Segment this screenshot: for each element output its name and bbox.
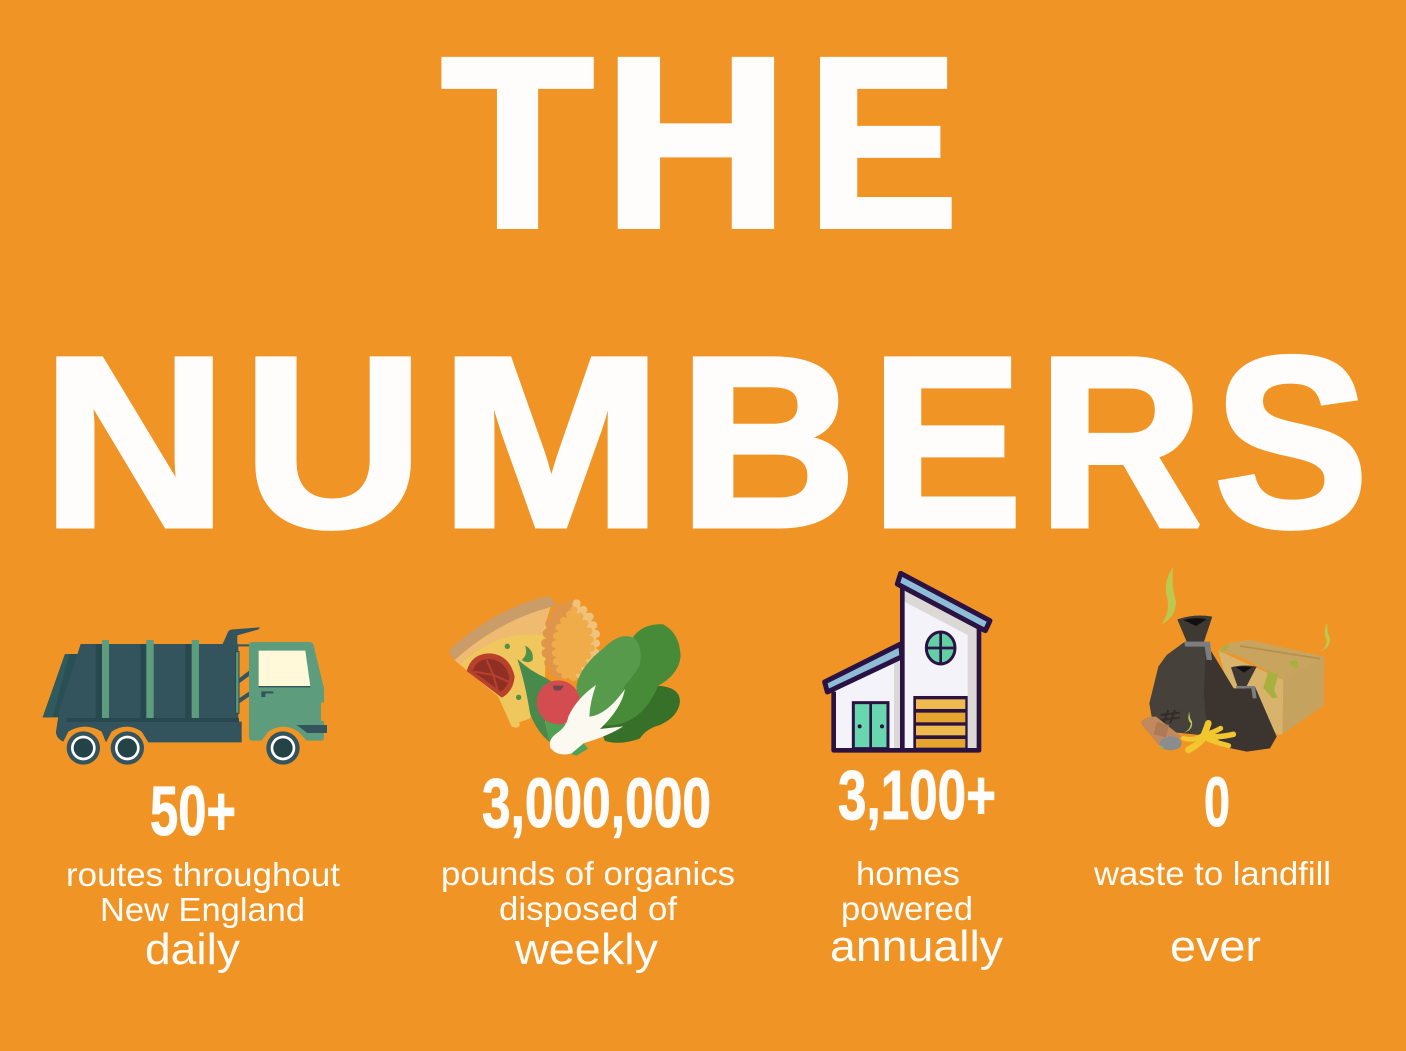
- title line: NUMBERS: U: [243, 307, 424, 578]
- label: homes powered: homes: [856, 855, 960, 892]
- stat: 3,100+: 3,100+: [838, 756, 996, 834]
- title line: NUMBERS: E: [871, 307, 1022, 578]
- panel: homes: [825, 573, 1003, 971]
- label: routes throughout New England: [66, 856, 340, 928]
- stat: 0: 0: [1204, 763, 1230, 841]
- label: routes throughout New England: routes throughout: [66, 856, 340, 893]
- label: weekly: weekly: [514, 925, 658, 974]
- title line: THE: H: [603, 8, 789, 278]
- title line: NUMBERS: S: [1214, 307, 1368, 578]
- icon: house: [825, 573, 990, 750]
- label: routes throughout New England: New England: [100, 891, 305, 928]
- label: homes powered: [841, 855, 973, 927]
- label: pounds of organics disposed of: pounds of organics: [441, 855, 735, 892]
- label: waste to landfill: waste to landfill: [1093, 855, 1331, 892]
- panel: routes: [43, 627, 340, 974]
- stat: 50+: 50+: [150, 772, 236, 850]
- title line: THE: E: [807, 8, 958, 278]
- label: pounds of organics disposed of: disposed of: [499, 890, 678, 927]
- title: [42, 8, 1368, 578]
- label: homes powered: powered: [841, 890, 973, 927]
- stat: 3,000,000: 3,000,000: [482, 764, 711, 842]
- panel: landfill: [1093, 567, 1331, 971]
- panel: organics: [441, 597, 735, 974]
- title line: NUMBERS: M: [440, 307, 663, 578]
- label: ever: ever: [1170, 922, 1261, 971]
- icon: food scraps: [450, 597, 681, 756]
- label: annually: annually: [830, 922, 1003, 971]
- label: pounds of organics disposed of: [441, 855, 735, 927]
- label: daily: daily: [145, 925, 240, 974]
- icon: garbage truck: [43, 627, 327, 765]
- title line: NUMBERS: R: [1038, 307, 1203, 578]
- title line: THE: T: [441, 8, 594, 278]
- title line: NUMBERS: N: [42, 307, 228, 578]
- title line: NUMBERS: B: [679, 307, 857, 578]
- icon: trash bags and box: [1141, 567, 1330, 752]
